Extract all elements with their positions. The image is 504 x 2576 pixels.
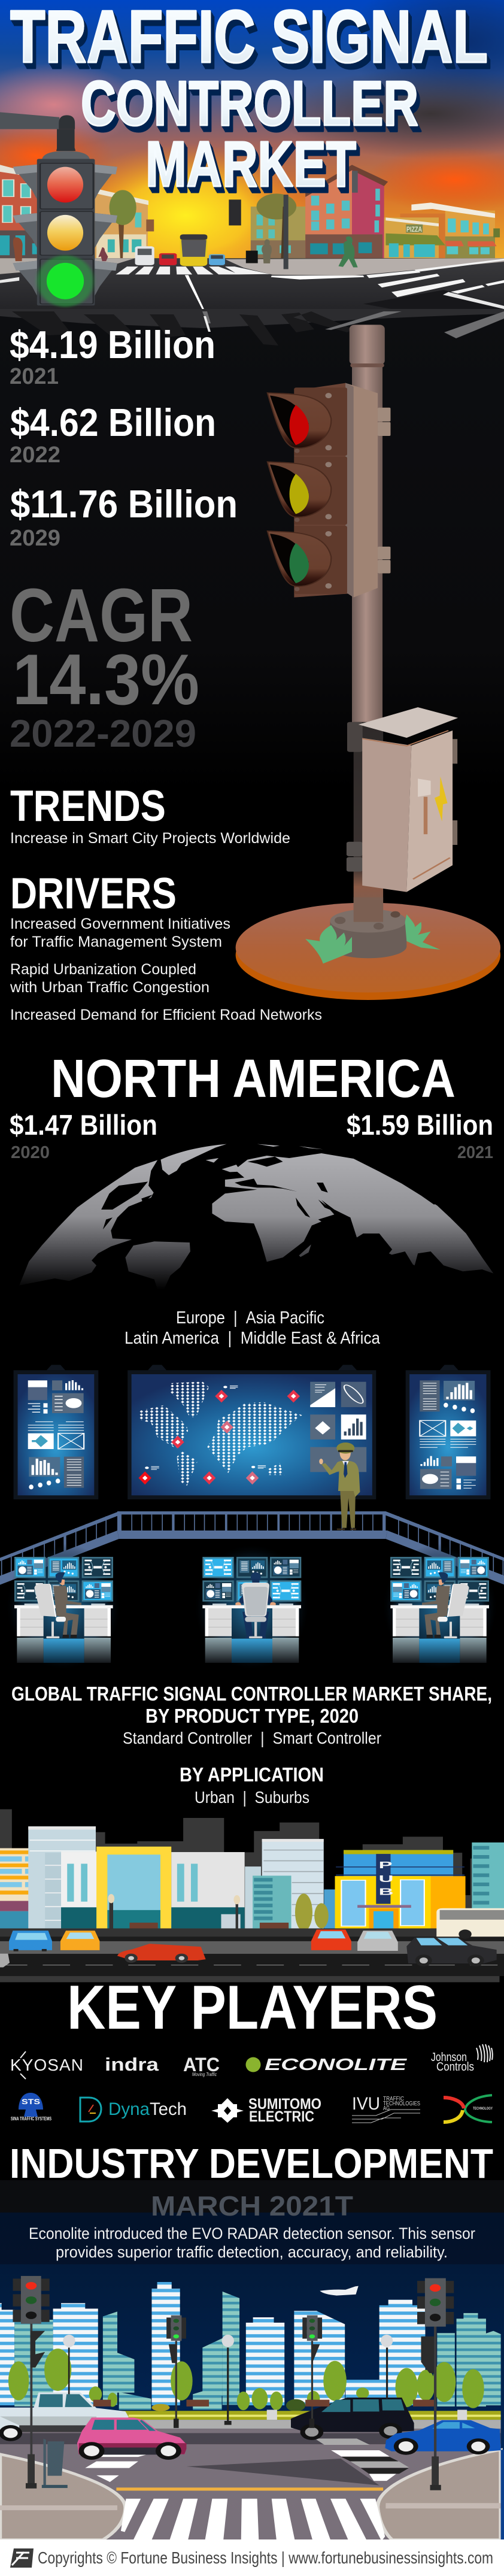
dotted world map bbox=[138, 1381, 302, 1487]
heading: key players: KEY PLAYERS bbox=[67, 1973, 438, 2042]
logo: IVU: IVU bbox=[352, 2094, 380, 2114]
hero street scene: PIZZA bbox=[406, 225, 422, 234]
trees bbox=[8, 2348, 484, 2411]
market size stats: 2029 bbox=[10, 526, 60, 551]
heading: drivers: DRIVERS bbox=[10, 869, 177, 918]
market size stats: $4.62 Billion bbox=[10, 401, 216, 444]
heading: market share by product type: BY PRODUCT TYPE, 2020 bbox=[145, 1705, 359, 1727]
plants bbox=[305, 925, 352, 963]
logo: Sumitomo Electric: ELECTRIC bbox=[249, 2108, 314, 2125]
street furniture bbox=[26, 2323, 467, 2490]
logo: Johnson Controls: Johnson bbox=[431, 2051, 467, 2064]
CAGR: 2022-2029 bbox=[10, 712, 196, 755]
heading: North America: NORTH AMERICA bbox=[51, 1049, 456, 1109]
heading: March 2021: MARCH 2021T bbox=[151, 2190, 353, 2222]
logo: IVU: TECHNOLOGIES bbox=[383, 2101, 420, 2107]
corners and crossing bbox=[0, 2450, 501, 2540]
logo: DynaTech: Tech bbox=[150, 2099, 187, 2119]
logo: Johnson Controls bbox=[431, 2044, 493, 2074]
heading: drivers: for Traffic Management System bbox=[10, 934, 222, 950]
logo: Johnson Controls: Controls bbox=[436, 2060, 474, 2074]
development description: Econolite introduced the EVO RADAR detection sensor. This sensor bbox=[29, 2225, 475, 2242]
pub sign: U bbox=[379, 1874, 393, 1884]
red lens bbox=[290, 405, 309, 445]
logo: IVU bbox=[352, 2094, 420, 2123]
logo: Kyosan: KYOSAN bbox=[10, 2056, 83, 2074]
traffic lights bbox=[13, 2276, 454, 2373]
globe map bbox=[19, 1144, 493, 1289]
logo: IVU: TRAFFIC bbox=[383, 2096, 404, 2102]
vehicles and pedestrians bbox=[13, 195, 358, 269]
logo: Sumitomo Electric: SUMITOMO bbox=[248, 2096, 321, 2113]
workstation centre bbox=[194, 1544, 309, 1671]
heading: drivers: with Urban Traffic Congestion bbox=[10, 979, 210, 996]
skyline silhouette bbox=[0, 1809, 499, 1982]
heading: trends: TRENDS bbox=[10, 782, 166, 831]
development description bbox=[29, 2225, 475, 2261]
regional values: $1.47 Billion bbox=[10, 1109, 157, 1141]
heading: drivers bbox=[10, 869, 322, 1023]
logo: Indra: indra bbox=[105, 2054, 159, 2075]
north america and greenland bbox=[19, 1144, 227, 1286]
right wall screen bbox=[406, 1365, 490, 1499]
cars bbox=[0, 1929, 497, 1968]
pub sign bbox=[379, 1860, 393, 1897]
officer figure bbox=[319, 1442, 360, 1530]
centre wall screen bbox=[127, 1365, 376, 1499]
south america bbox=[125, 1241, 190, 1289]
heading: trends bbox=[10, 782, 290, 847]
road bbox=[0, 1928, 504, 1976]
heading: by application: Urban | Suburbs bbox=[195, 1788, 309, 1807]
logo: Econolite bbox=[245, 2055, 408, 2074]
heading: drivers: Rapid Urbanization Coupled bbox=[10, 961, 196, 978]
CAGR: 14.3% bbox=[13, 640, 199, 720]
left wall screen bbox=[14, 1365, 98, 1499]
heading: drivers: Increased Government Initiatives bbox=[10, 916, 230, 932]
road and crosswalks bbox=[0, 258, 504, 311]
regional values: 2020 bbox=[11, 1143, 50, 1162]
heading: market share by product type bbox=[11, 1683, 492, 1747]
logo: Econolite: ECONOLITE bbox=[265, 2055, 408, 2074]
yellow lamp bbox=[47, 215, 83, 251]
market size stats bbox=[10, 323, 238, 551]
illustration: city intersection bbox=[0, 2276, 504, 2540]
logo: ATC: Moving Traffic bbox=[192, 2072, 217, 2077]
illustration: 3D traffic signal on pole bbox=[268, 325, 390, 739]
hero street scene bbox=[0, 0, 504, 346]
seas bbox=[101, 1157, 437, 1280]
logo: 3C technology: TECHNOLOGY bbox=[473, 2107, 493, 2111]
CAGR: CAGR bbox=[10, 573, 193, 657]
region list: Latin America | Middle East & Africa bbox=[125, 1329, 381, 1348]
illustration: control box, pole base and plate bbox=[236, 707, 500, 1000]
pub sign: B bbox=[379, 1887, 393, 1897]
logo: STS bbox=[11, 2093, 51, 2122]
logo: DynaTech: Dyna bbox=[108, 2099, 150, 2119]
walkway railing bbox=[0, 1511, 504, 1585]
heading: drivers: Increased Demand for Efficient Road Networks bbox=[10, 1007, 322, 1023]
road lower edge with rays bbox=[0, 309, 504, 346]
logo: DynaTech bbox=[80, 2098, 187, 2122]
logo: 3C technology bbox=[444, 2095, 493, 2122]
illustration: city street bbox=[0, 1809, 504, 1982]
market size stats: 2022 bbox=[10, 443, 60, 468]
development panel background bbox=[0, 2180, 504, 2539]
cars bbox=[0, 2392, 501, 2460]
heading: by application: BY APPLICATION bbox=[180, 1763, 324, 1786]
pub sign: P bbox=[379, 1860, 393, 1871]
red lamp bbox=[47, 167, 83, 202]
logo: STS: SINA TRAFFIC SYSTEMS bbox=[11, 2116, 51, 2122]
logo: Sumitomo Electric bbox=[211, 2096, 321, 2125]
right buildings bbox=[251, 165, 500, 258]
workstation right bbox=[382, 1544, 498, 1671]
left buildings bbox=[0, 165, 154, 258]
market size stats: $11.76 Billion bbox=[10, 482, 238, 526]
title: MARKET bbox=[145, 128, 356, 200]
green lens bbox=[290, 543, 309, 583]
CAGR bbox=[10, 573, 199, 755]
heading: by application bbox=[180, 1763, 324, 1807]
logo: Kyosan bbox=[10, 2051, 83, 2079]
map markers bbox=[138, 1386, 300, 1484]
green lamp bbox=[37, 255, 93, 307]
skyline bbox=[0, 2282, 501, 2410]
illustration: traffic control room bbox=[0, 1365, 504, 1585]
workstation left bbox=[5, 1544, 122, 1671]
market size stats: $4.19 Billion bbox=[10, 323, 215, 366]
development description: provides superior traffic detection, accuracy, and reliability. bbox=[56, 2243, 448, 2261]
hedge and pavement bbox=[0, 2411, 501, 2540]
heading: market share by product type: Standard Controller | Smart Controller bbox=[123, 1729, 381, 1747]
cabinet bbox=[362, 738, 411, 892]
heading: trends: Increase in Smart City Projects Worldwide bbox=[10, 830, 290, 847]
logo: IVU: AG bbox=[383, 2105, 390, 2112]
regional values bbox=[10, 1109, 493, 1162]
eurasia and africa bbox=[212, 1153, 493, 1274]
logo: STS: STS bbox=[22, 2098, 40, 2106]
footer bbox=[0, 2539, 504, 2576]
regional values: 2021 bbox=[457, 1143, 493, 1162]
region list: Europe | Asia Pacific bbox=[176, 1308, 324, 1328]
airplane bbox=[320, 2286, 359, 2296]
icon: Fortune Business Insights logo bbox=[10, 2548, 34, 2568]
bus bbox=[436, 1908, 504, 1939]
icon: foreground traffic light bbox=[0, 112, 117, 307]
region list bbox=[125, 1308, 381, 1348]
market size stats: 2021 bbox=[10, 364, 59, 389]
title bbox=[10, 0, 488, 200]
buildings bbox=[0, 1826, 504, 1939]
logo: ATC: ATC bbox=[183, 2054, 220, 2075]
yellow lens bbox=[290, 474, 309, 514]
